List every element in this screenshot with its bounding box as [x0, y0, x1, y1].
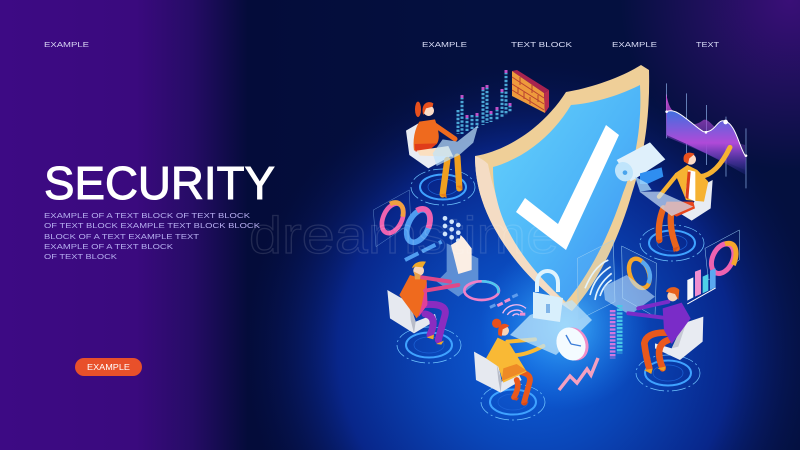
- chair: [387, 290, 437, 333]
- navigation: right links: [422, 40, 719, 49]
- torso: [486, 338, 527, 383]
- torso: [399, 275, 427, 318]
- icon: equalizer bars: [458, 70, 510, 134]
- laptop: [433, 125, 478, 166]
- head: [423, 105, 434, 116]
- chair: [655, 317, 703, 360]
- head: [667, 291, 678, 301]
- icon: wifi tiles: [489, 293, 526, 316]
- shield frame: [475, 65, 649, 311]
- shield: [475, 65, 649, 311]
- navigation: right links: TEXT: [696, 40, 719, 49]
- navigation: right links: EXAMPLE: [612, 40, 657, 49]
- navigation: left link: EXAMPLE: [44, 40, 89, 49]
- title: SECURITY: [44, 157, 275, 209]
- head: [685, 154, 696, 165]
- torso: [414, 119, 439, 151]
- person: man in purple, bottom right: [628, 287, 703, 374]
- icon: fingerprint panel: [577, 240, 615, 320]
- check mark: [516, 125, 619, 250]
- button: [75, 358, 142, 376]
- person: woman with bun, bottom centre: [474, 319, 543, 405]
- icon: zigzag trend arrow: [559, 358, 598, 390]
- icon: padlock: [510, 271, 592, 355]
- chair: [406, 123, 450, 168]
- chair: [680, 180, 713, 221]
- chart: area chart: [665, 83, 747, 188]
- legs: [443, 157, 459, 194]
- icon: donut and panel, centre right: [603, 246, 657, 317]
- watermark: dreamstime: [249, 207, 559, 265]
- text block: OF TEXT BLOCK EXAMPLE TEXT BLOCK BLOCK: [44, 223, 260, 230]
- icon: dotted bars, lower centre: [613, 305, 620, 358]
- person: bearded man, bottom left: [387, 261, 499, 345]
- icon: brick wall: [512, 70, 549, 113]
- arms: [422, 277, 458, 291]
- chair: [474, 352, 522, 393]
- person: woman with laptop, top left: [406, 102, 478, 198]
- shield frame inner bevel: [475, 156, 572, 311]
- legs: [420, 304, 445, 340]
- text block: BLOCK OF A TEXT EXAMPLE TEXT: [44, 234, 200, 241]
- text block: EXAMPLE OF A TEXT BLOCK OF TEXT BLOCK: [44, 213, 250, 220]
- button: EXAMPLE: [87, 363, 130, 372]
- head: [413, 265, 424, 276]
- shield face: [493, 85, 640, 302]
- text block: [44, 213, 260, 261]
- legs: [659, 208, 677, 248]
- torso: [663, 303, 691, 344]
- arms: [507, 339, 543, 355]
- icon: keypad with pointing hand: [437, 216, 478, 297]
- navigation: right links: EXAMPLE: [422, 40, 467, 49]
- laptop: [639, 192, 693, 216]
- icon: clock: [551, 323, 594, 365]
- ring widget: [464, 281, 499, 300]
- text block: OF TEXT BLOCK: [44, 254, 117, 261]
- icon: donut charts, left: [373, 190, 442, 260]
- navigation: right links: TEXT BLOCK: [511, 40, 572, 49]
- arms: [628, 302, 668, 318]
- icon: donut and bar panel, far right: [687, 230, 739, 304]
- icon: security camera: [611, 142, 665, 192]
- legs: [644, 333, 668, 368]
- arms: [700, 147, 730, 177]
- person: man in tie, top right: [639, 147, 730, 252]
- head: [499, 326, 509, 336]
- text block: EXAMPLE OF A TEXT BLOCK: [44, 244, 173, 251]
- platform rings under the people: [397, 169, 704, 420]
- torso: [675, 165, 708, 202]
- legs: [513, 372, 530, 403]
